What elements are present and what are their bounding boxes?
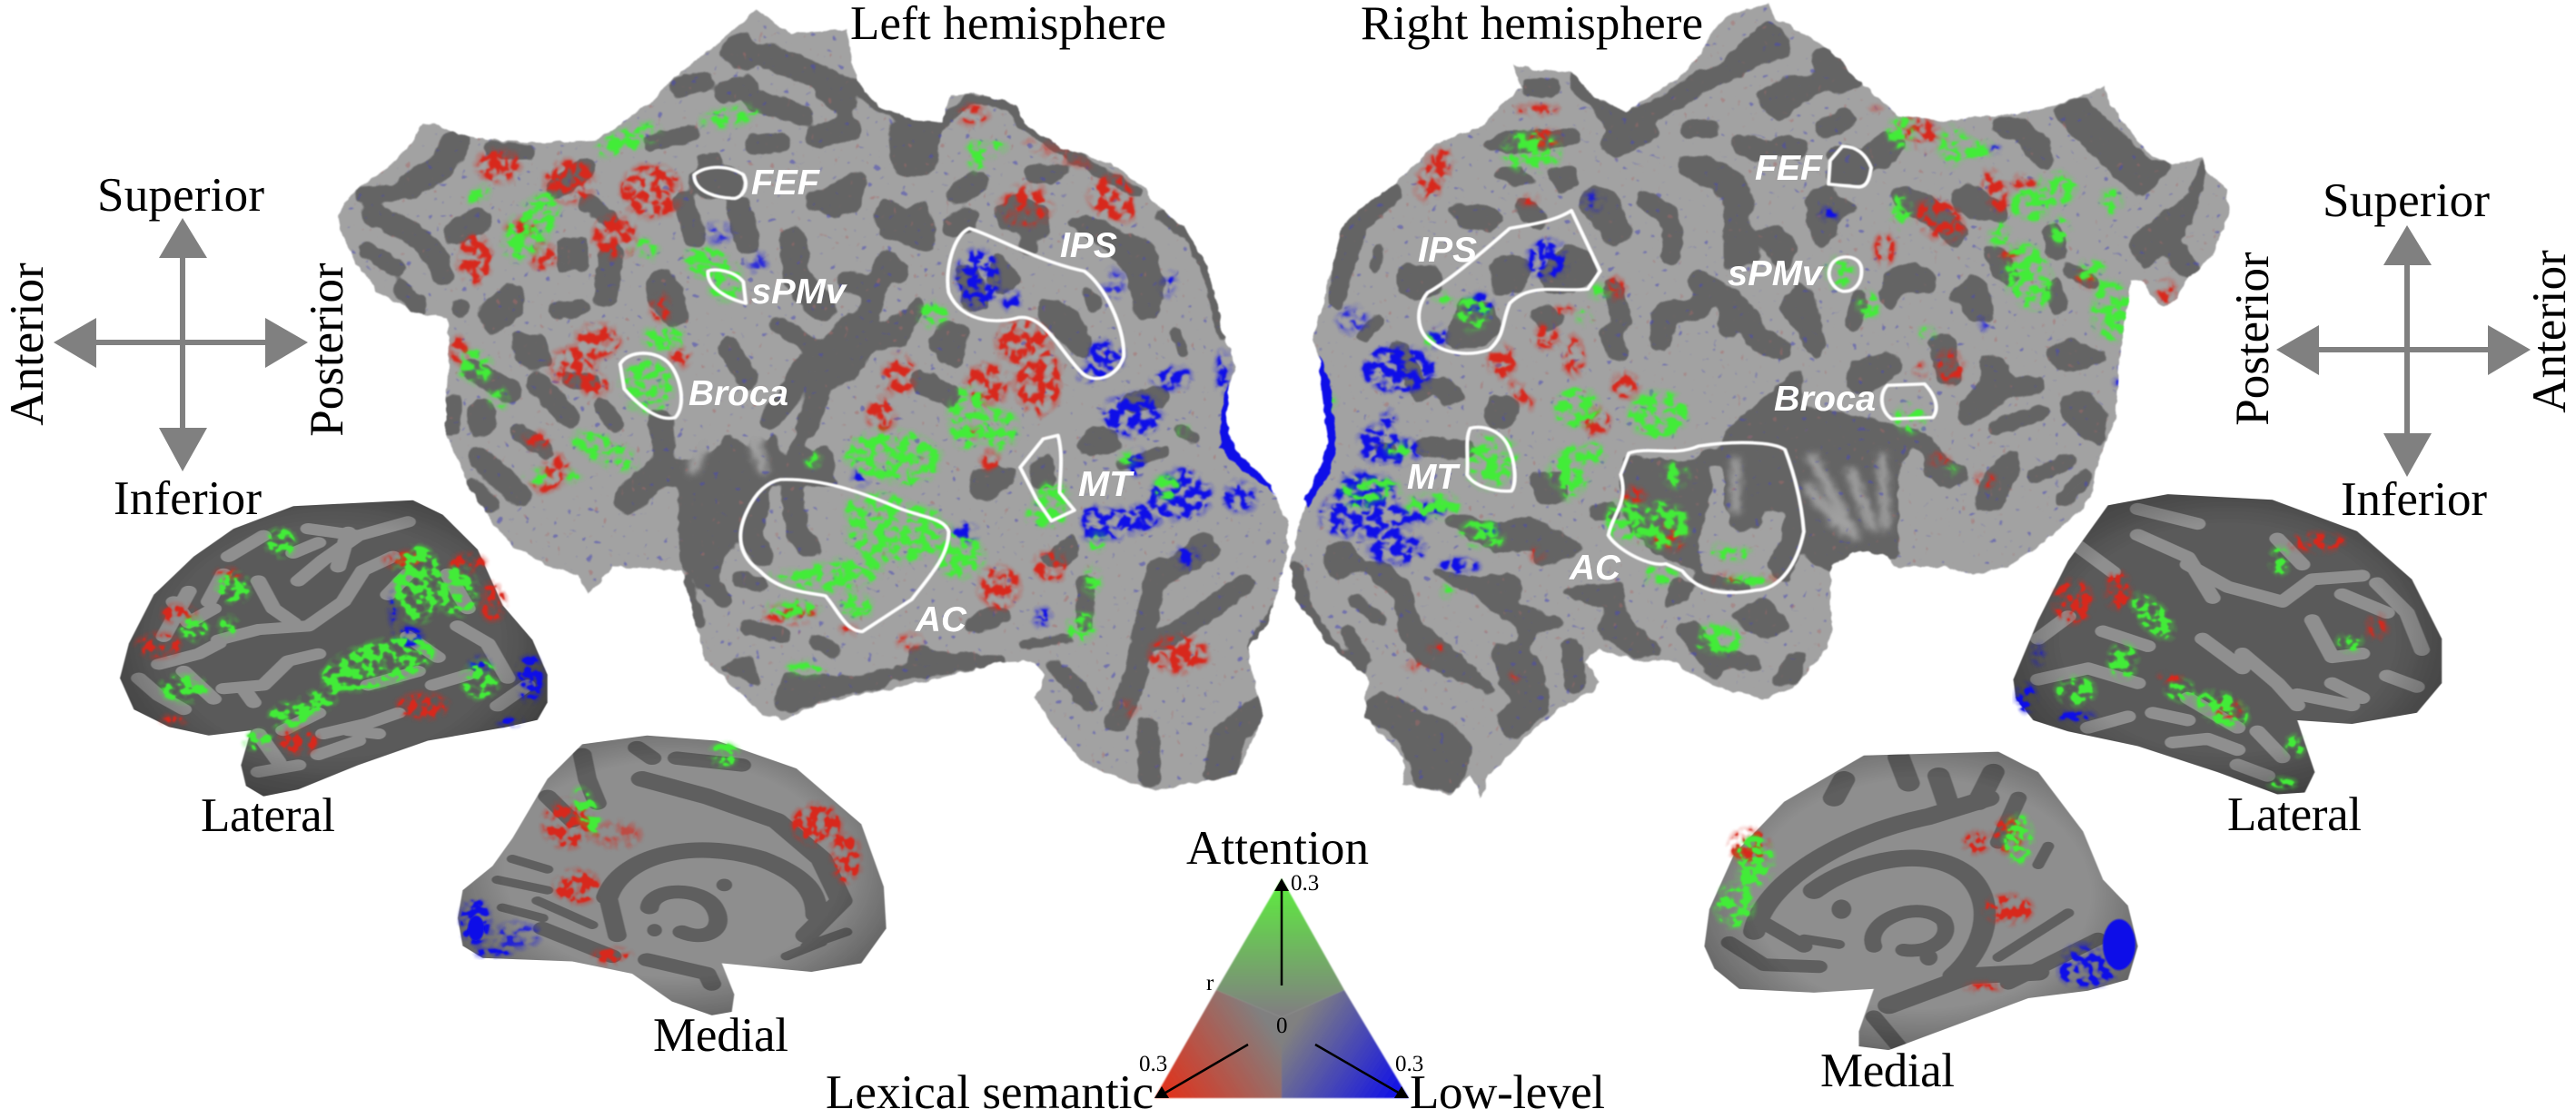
left orientation labels: Posterior <box>301 262 353 437</box>
right flatmap blue activation <box>1319 144 2125 575</box>
right flatmap red activation <box>1402 104 2177 680</box>
left orientation cross arrows <box>54 218 308 471</box>
triangle scale labels: 0.3 <box>1291 871 1319 896</box>
right flatmap regions of interest <box>1419 146 1937 592</box>
right medial green activation <box>1713 812 2035 928</box>
right orientation labels <box>2226 174 2576 526</box>
right orientation labels: Posterior <box>2226 252 2279 426</box>
caption: left lateral: Lateral <box>201 789 335 842</box>
right flatmap surface and activation <box>1281 0 2244 808</box>
left flatmap regions of interest <box>620 167 1124 631</box>
legend: colour triangle <box>826 822 1605 1119</box>
left flatmap region labels: FEF <box>751 163 820 203</box>
right lateral anatomy <box>2004 490 2452 798</box>
left flatmap region labels <box>689 163 1134 639</box>
right flatmap region labels: MT <box>1407 458 1461 497</box>
triangle corner labels: Lexical semantic <box>826 1066 1154 1119</box>
right lateral blue activation <box>2015 640 2096 722</box>
left orientation labels: Superior <box>97 169 264 222</box>
right flatmap region labels: FEF <box>1755 149 1823 188</box>
left flatmap region labels: sPMv <box>751 272 847 312</box>
left flatmap region labels: MT <box>1078 465 1134 504</box>
left flatmap region labels: AC <box>915 600 967 639</box>
right flatmap green activation <box>1324 115 2133 656</box>
caption: right lateral: Lateral <box>2227 788 2362 841</box>
right flatmap region labels: sPMv <box>1728 254 1824 293</box>
triangle corner labels: Low-level <box>1410 1066 1605 1119</box>
triangle scale labels: 0 <box>1276 1014 1288 1038</box>
right flatmap region labels: AC <box>1569 549 1621 588</box>
triangle scale labels: 0.3 <box>1139 1052 1167 1076</box>
right orientation labels: Superior <box>2323 174 2490 227</box>
left lateral brain surface <box>109 490 558 803</box>
left flatmap: cortical surface with activity <box>327 0 1299 799</box>
triangle scale labels: r <box>1206 971 1214 995</box>
left lateral anatomy <box>109 490 558 803</box>
left lateral green activation <box>158 527 500 752</box>
left medial brain surface <box>448 730 897 1019</box>
right orientation labels: Anterior <box>2523 250 2576 413</box>
left orientation labels <box>1 169 353 525</box>
left flatmap region labels: Broca <box>689 374 788 413</box>
left medial red activation <box>541 799 862 965</box>
triangle scale labels <box>1139 871 1423 1076</box>
caption: left medial: Medial <box>653 1009 788 1062</box>
right flatmap region labels <box>1407 149 1876 588</box>
caption: right medial: Medial <box>1820 1045 1955 1097</box>
left medial green activation <box>567 741 740 837</box>
left lateral activation <box>135 550 507 756</box>
right lateral green activation <box>2055 545 2363 789</box>
left flatmap green activation <box>458 100 1194 678</box>
right flatmap: cortical surface with activity <box>1281 0 2244 808</box>
triangle corner labels <box>826 822 1605 1119</box>
left orientation labels: Inferior <box>114 472 262 525</box>
right medial blue activation <box>2057 942 2119 988</box>
right flatmap region labels: Broca <box>1774 380 1876 419</box>
right flatmap region labels: IPS <box>1418 231 1477 270</box>
triangle axes and arrowheads <box>1154 878 1409 1098</box>
right lateral red activation <box>2052 532 2389 719</box>
left lateral blue activation <box>389 589 544 727</box>
triangle corner labels: Attention <box>1186 822 1369 875</box>
left flatmap red activation <box>448 104 1209 718</box>
left orientation labels: Anterior <box>1 262 54 426</box>
triangle colour fields <box>1154 878 1409 1098</box>
left flatmap surface and activation <box>327 0 1299 799</box>
left flatmap region labels: IPS <box>1060 226 1117 265</box>
right medial anatomy <box>1694 747 2148 1054</box>
left medial blue activation <box>460 897 542 958</box>
left medial anatomy <box>448 730 897 1019</box>
right medial brain surface <box>1694 747 2148 1054</box>
right orientation labels: Inferior <box>2341 473 2487 526</box>
right medial red activation <box>1729 816 2035 992</box>
right orientation cross arrows <box>2276 225 2531 477</box>
triangle scale labels: 0.3 <box>1395 1052 1423 1076</box>
left flatmap blue activation <box>704 223 1258 629</box>
right lateral brain surface <box>2004 490 2452 798</box>
